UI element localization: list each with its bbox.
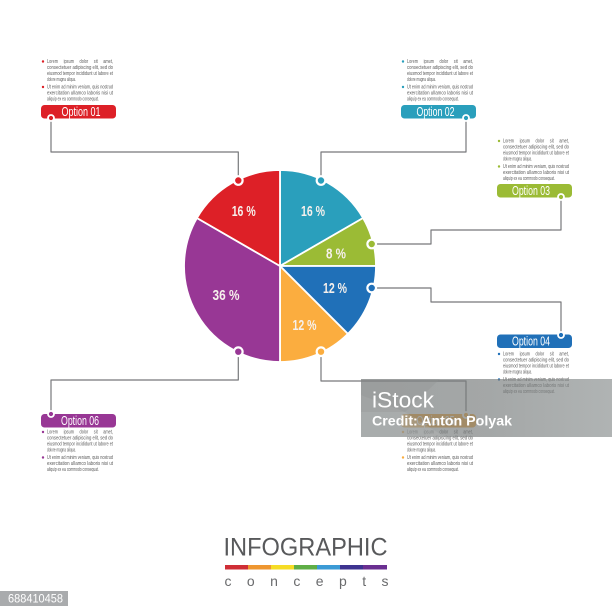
text block: Option 06 [42, 430, 113, 473]
text block: Option 03: exercitation ullamco laboris nisi ut [503, 170, 569, 176]
stock id tag [0, 591, 68, 606]
label: Option 02: Option 02 [416, 105, 455, 119]
text block: Option 06: consectetuer adipiscing elit, sed do [47, 436, 113, 442]
slice: 12% orange [280, 266, 348, 362]
text block: Option 04: exercitation ullamco laboris nisi ut [503, 383, 569, 389]
iStock wordmark: iStock [372, 388, 435, 412]
text block: Option 05: exercitation ullamco laboris nisi ut [407, 461, 473, 467]
slice: 16% teal [280, 170, 363, 266]
text block: Option 02: exercitation ullamco laboris nisi ut [407, 90, 473, 96]
slice: 16% red [197, 170, 280, 266]
pie chart [184, 170, 376, 362]
photographer credit: Credit: Anton Polyak [372, 412, 512, 428]
text block: Option 03: consectetuer adipiscing elit, sed do [503, 144, 569, 150]
text block: Option 02: dolore magna aliqua. [407, 77, 436, 83]
text block: Option 04 [498, 352, 569, 395]
percentage labels: 36 % [212, 288, 240, 304]
text block: Option 04: aliquip ex ea commodo consequat. [503, 389, 555, 395]
percentage labels: 12 % [323, 281, 347, 297]
text block: Option 04: consectetuer adipiscing elit, sed do [503, 358, 569, 364]
label: Option 01: Option 01 [62, 105, 101, 119]
percentage labels [212, 204, 347, 334]
connector dots [48, 115, 564, 418]
text block: Option 06: exercitation ullamco laboris nisi ut [47, 461, 113, 467]
text block: Option 05: Lorem ipsum dolor sit amet, [407, 430, 473, 436]
watermark banner [361, 379, 612, 437]
label: Option 05: Option 05 [416, 414, 455, 428]
text block: Option 03: Ut enim ad minim veniam, quis nostrud [503, 164, 569, 170]
text block: Option 01: aliquip ex ea commodo consequat. [47, 96, 99, 102]
stock id tag: 688410458 [8, 594, 63, 606]
text block: Option 01 [42, 59, 113, 102]
logo title: INFOGRAPHIC [224, 534, 388, 562]
logo: infographic concepts [224, 534, 388, 589]
text block: Option 06: Ut enim ad minim veniam, quis nostrud [47, 455, 113, 461]
rainbow bar [225, 565, 387, 570]
text block: Option 01: dolore magna aliqua. [47, 77, 76, 83]
slice: 36% purple [184, 218, 280, 362]
text block: Option 06: Lorem ipsum dolor sit amet, [47, 430, 113, 436]
text block: Option 03 [498, 138, 569, 182]
text block: Option 05 [402, 430, 473, 473]
slice: 12% blue [280, 266, 376, 334]
text block: Option 05: consectetuer adipiscing elit, sed do [407, 436, 473, 442]
text block: Option 01: Lorem ipsum dolor sit amet, [47, 59, 113, 65]
text block: Option 06: eiusmod tempor incididunt ut labore et [47, 442, 113, 448]
label: Option 04: Option 04 [512, 335, 550, 349]
connector lines [51, 118, 561, 415]
slice: 8% green [280, 218, 376, 266]
text block: Option 03: eiusmod tempor incididunt ut labore et [503, 150, 569, 156]
percentage labels: 16 % [232, 204, 256, 220]
label: Option 03: Option 03 [512, 184, 550, 198]
percentage labels: 8 % [326, 246, 346, 262]
percentage labels: 12 % [292, 318, 317, 334]
text block: Option 03: aliquip ex ea commodo consequat. [503, 176, 555, 182]
text block: Option 02: consectetuer adipiscing elit, sed do [407, 65, 473, 71]
text block: Option 04: Lorem ipsum dolor sit amet, [503, 352, 569, 358]
text block: Option 04: dolore magna aliqua. [503, 370, 532, 376]
text block: Option 02: Ut enim ad minim veniam, quis nostrud [407, 84, 473, 90]
text block: Option 05: Ut enim ad minim veniam, quis nostrud [407, 455, 473, 461]
text block: Option 04: eiusmod tempor incididunt ut labore et [503, 364, 569, 370]
text block: Option 01: Ut enim ad minim veniam, quis nostrud [47, 84, 113, 90]
logo subtitle: concepts [224, 573, 388, 589]
text block: Option 06: dolore magna aliqua. [47, 448, 76, 454]
text block: Option 02: Lorem ipsum dolor sit amet, [407, 59, 473, 65]
text block: Option 01: eiusmod tempor incididunt ut labore et [47, 71, 113, 77]
text block: Option 01: exercitation ullamco laboris nisi ut [47, 90, 113, 96]
text block: Option 02 [402, 59, 473, 102]
text block: Option 02: eiusmod tempor incididunt ut labore et [407, 71, 473, 77]
text block: Option 03: Lorem ipsum dolor sit amet, [503, 138, 569, 144]
text block: Option 01: consectetuer adipiscing elit, sed do [47, 65, 113, 71]
text block: Option 03: dolore magna aliqua. [503, 156, 532, 162]
text block: Option 02: aliquip ex ea commodo consequat. [407, 96, 459, 102]
percentage labels: 16 % [301, 204, 325, 220]
text block: Option 05: aliquip ex ea commodo consequat. [407, 467, 459, 473]
text block: Option 04: Ut enim ad minim veniam, quis nostrud [503, 377, 569, 383]
label: Option 06: Option 06 [61, 414, 99, 428]
text block: Option 06: aliquip ex ea commodo consequat. [47, 467, 99, 473]
text block: Option 05: eiusmod tempor incididunt ut labore et [407, 442, 473, 448]
text block: Option 05: dolore magna aliqua. [407, 448, 436, 454]
